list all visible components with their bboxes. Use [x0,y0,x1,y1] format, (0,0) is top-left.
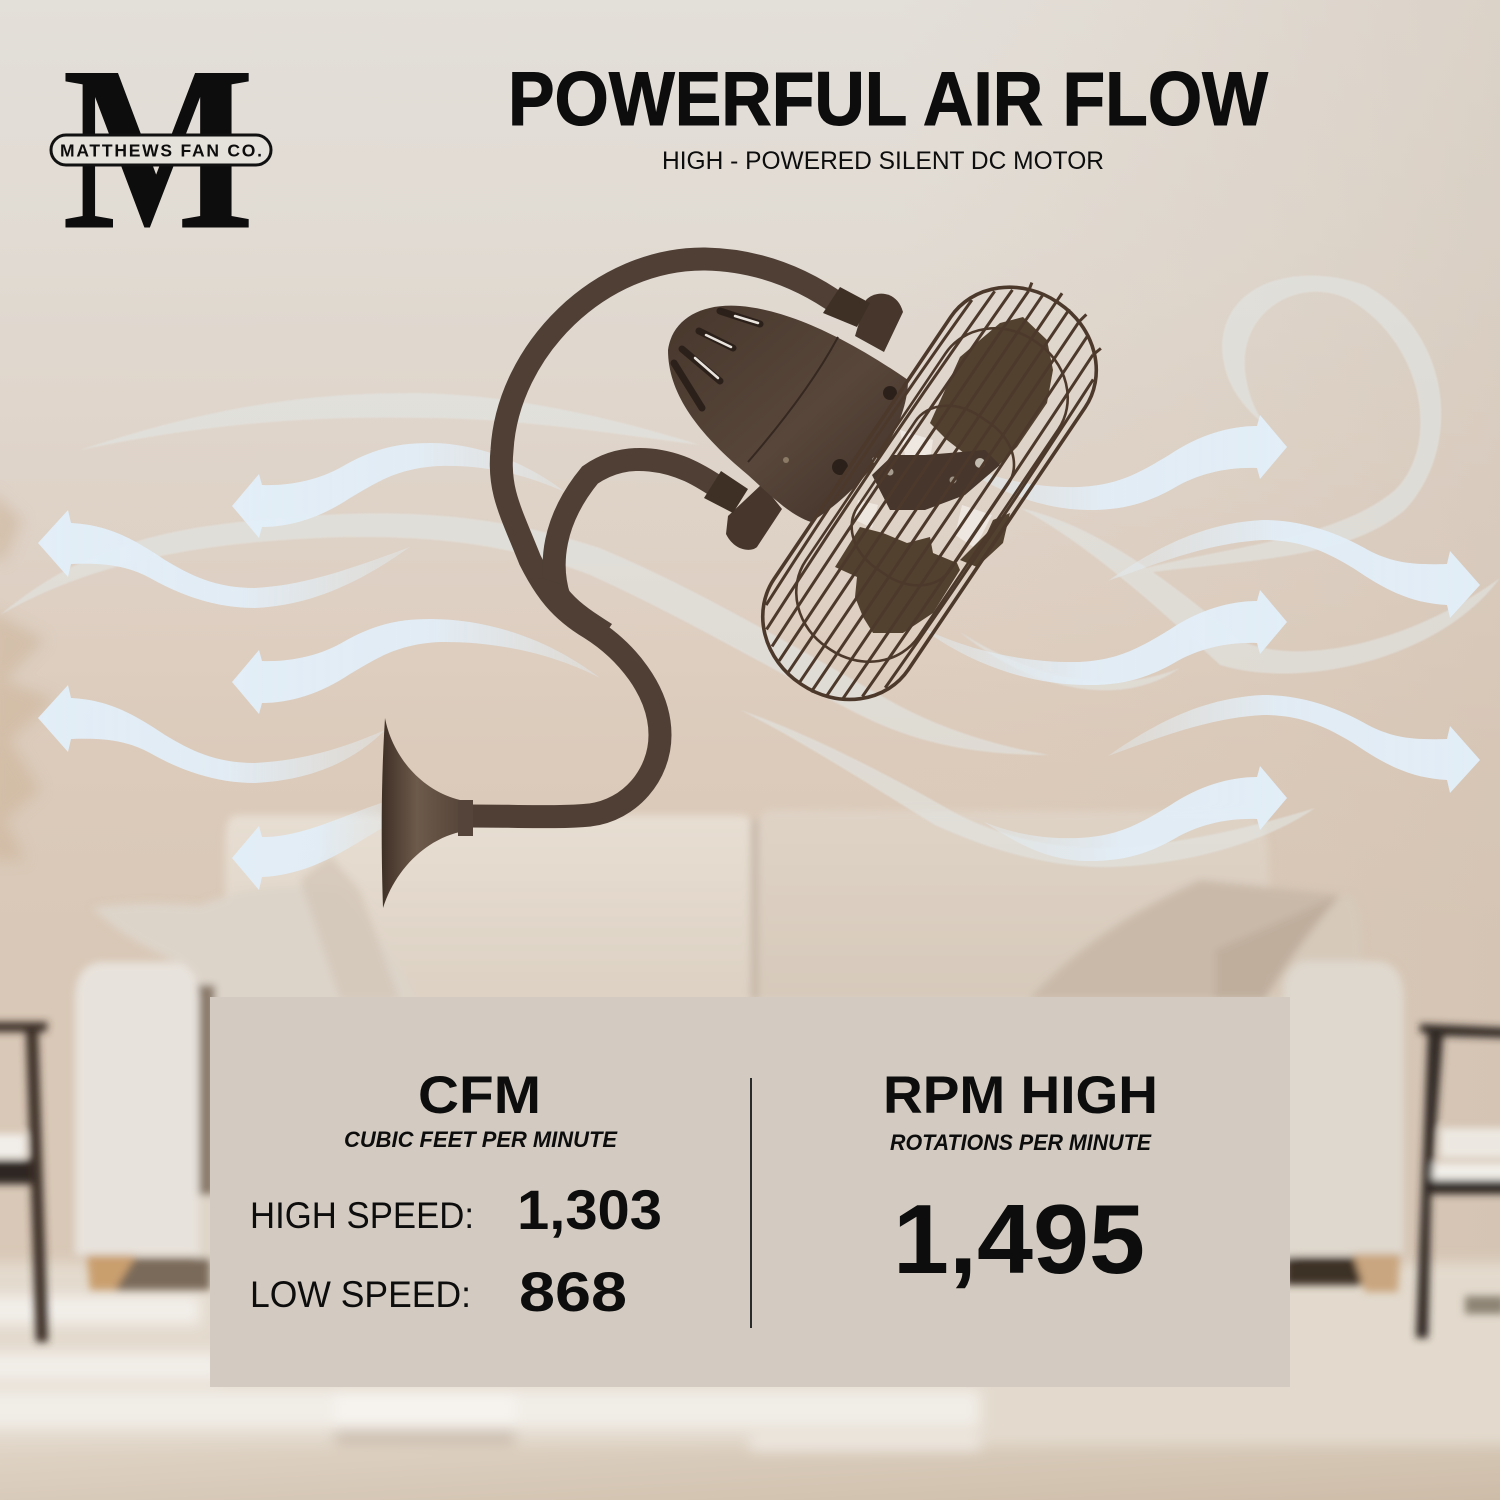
sofa dark gap left [195,985,215,1195]
light gaps behind the grille [855,430,992,548]
arrow: left upper outer [38,510,410,608]
sofa legs [87,1255,135,1290]
arrow: left upper inner [232,443,565,538]
arrow: left lower outer [38,685,385,783]
logo monogram M: M [62,17,255,279]
arrow: right lower inner [984,766,1287,861]
floor and rug [0,1262,1500,1452]
divider [750,1078,752,1328]
sofa back right edge [1268,895,1362,1000]
low speed value: 868 [519,1260,627,1323]
arm junction [513,530,612,644]
airflow arrows [38,415,1480,890]
motor housing [668,306,908,522]
logo name pill: MATTHEWS FAN CO. [60,140,262,160]
small floor object [1465,1296,1500,1314]
arrow: right upper outer [1108,520,1480,618]
arrow: right middle inner [919,590,1287,685]
arrow: left lower inner [232,802,384,890]
upper motor bracket [823,287,903,352]
fan blades [835,317,1053,633]
right chair [1416,1024,1500,1338]
fan hub [872,450,1000,510]
arrow: right lower outer [1108,695,1480,793]
low speed label: LOW SPEED: [250,1274,471,1315]
panel: specifications [210,997,1290,1387]
plant silhouette [0,490,55,860]
right throw pillow [1027,880,1340,1005]
column: CFM [250,1066,662,1323]
logo name pill [51,135,271,165]
RPM heading: RPM HIGH [883,1066,1158,1125]
lower motor bracket [704,471,782,550]
fan arms [470,259,840,817]
sofa shadow between cushions [751,820,758,1010]
left chair [0,1022,48,1342]
column: RPM [883,1066,1158,1294]
left arm [75,962,199,1255]
fan cage [733,249,1131,730]
title: POWERFUL AIR FLOW [508,57,1268,142]
high speed label: HIGH SPEED: [250,1195,474,1236]
arrow: left middle inner [232,619,600,714]
RPM definition: ROTATIONS PER MINUTE [890,1130,1152,1155]
CFM definition: CUBIC FEET PER MINUTE [344,1127,618,1152]
CFM heading: CFM [418,1066,541,1125]
left throw pillow [92,887,420,1005]
brand logo [51,17,271,279]
faint air swirl streams [0,275,1500,867]
sofa back cushions [225,815,756,1010]
right arm [1283,961,1404,1255]
wall plate [382,718,473,908]
subtitle: HIGH - POWERED SILENT DC MOTOR [662,147,1104,175]
RPM value: 1,495 [893,1184,1145,1294]
arrow: right upper inner [954,415,1287,510]
high speed value: 1,303 [517,1178,662,1241]
sofa seat [195,1000,1295,1260]
wall-mounted fan [382,249,1131,908]
